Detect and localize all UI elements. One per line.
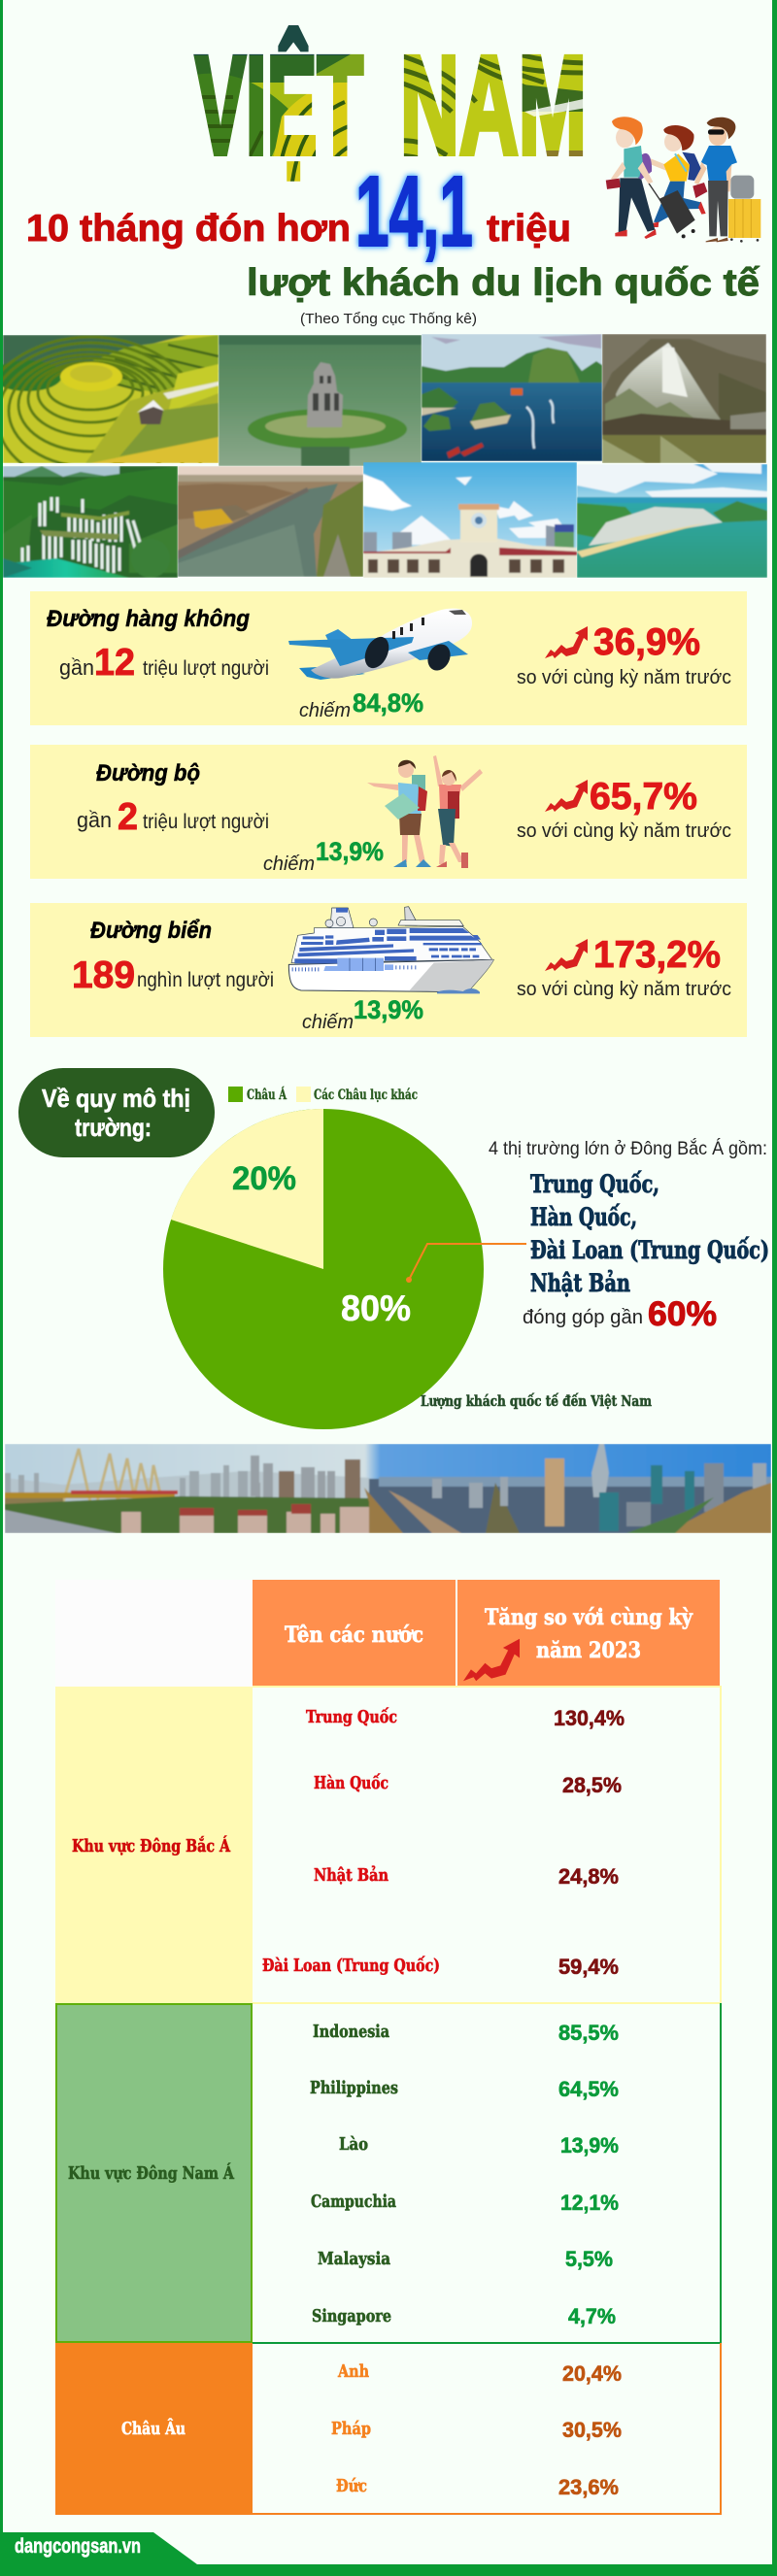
share: 13,9% road: chiếm [263, 853, 315, 875]
row: Đức: 23,6% [558, 2475, 619, 2499]
row: Lào: Lào [339, 2134, 368, 2155]
photo collage [0, 334, 767, 578]
row: Pháp [331, 2418, 622, 2442]
row: Singapore [312, 2304, 616, 2328]
share: 13,9% sea: chiếm [302, 1012, 354, 1033]
region label: Châu Âu [121, 2417, 186, 2439]
row: Campuchia [311, 2191, 619, 2215]
row: Trung Quốc: 130,4% [554, 1706, 625, 1730]
region label: Khu vực Đông Bắc Á [72, 1834, 231, 1857]
slice label: 20%: 20% [232, 1160, 296, 1197]
row: Trung Quốc [306, 1706, 625, 1730]
row: Singapore: 4,7% [568, 2304, 616, 2328]
row: Đài Loan: Đài Loan (Trung Quốc) [262, 1955, 440, 1976]
table header [55, 1580, 720, 1687]
photo: Turtle Tower on Hoan Kiem lake [219, 335, 422, 466]
row: Anh: Anh [337, 2361, 369, 2382]
text block: four North-East Asian markets: 4 thị trường lớn ở Đông Bắc Á gồm: [489, 1138, 767, 1159]
row: Đài Loan: 59,4% [558, 1955, 619, 1979]
row: Hàn Quốc: 28,5% [562, 1773, 622, 1797]
photo: Phu Quoc coast [577, 464, 767, 578]
row: Philippines [310, 2077, 619, 2101]
subheading line 1: triệu [487, 208, 571, 250]
photo: Ben Thanh market [363, 462, 577, 578]
text block: four North-East Asian markets: 60% [648, 1295, 717, 1333]
stat: 2 million people [77, 796, 269, 838]
photo: Son Doong cave [602, 334, 766, 463]
chart caption: Lượng khách quốc tế đến Việt Nam [421, 1392, 652, 1410]
growth: 65,7%: 65,7% [590, 776, 697, 818]
row: Đài Loan [262, 1955, 619, 1979]
heading: road: Đường bộ [96, 760, 200, 786]
pill heading: market scale: trường: [75, 1113, 152, 1142]
icon: airplane [288, 609, 472, 680]
slice label: 80%: 80% [341, 1288, 411, 1328]
row: Campuchia: Campuchia [311, 2191, 396, 2212]
row: Philippines: Philippines [310, 2078, 398, 2098]
row: Lào [339, 2133, 619, 2158]
row: Indonesia: 85,5% [558, 2021, 619, 2045]
growth: 173,2% [517, 934, 731, 1000]
panel: sea travel [30, 903, 747, 1037]
photo: Hoi An riverside [178, 466, 363, 577]
share: 13,9% sea: 13,9% [354, 995, 423, 1024]
growth: 36,9% [517, 621, 731, 688]
stat: 189 thousand people: nghìn lượt người [137, 969, 274, 991]
growth: 173,2%: so với cùng kỳ năm trước [517, 979, 731, 1000]
row: Campuchia: 12,1% [560, 2191, 619, 2215]
footer: source tab [0, 2532, 777, 2576]
row: Nhật Bản: 24,8% [558, 1864, 619, 1889]
table section: South-East Asia [56, 2003, 721, 2343]
region label: Khu vực Đông Nam Á [68, 2161, 235, 2184]
column heading: growth vs 2023 [485, 1605, 693, 1663]
row: Trung Quốc: Trung Quốc [306, 1706, 397, 1727]
panel: road travel [30, 745, 747, 879]
headline number 14,1: 14,1 [355, 155, 473, 267]
icon: growth arrow [463, 1639, 520, 1681]
row: Indonesia [313, 2021, 619, 2045]
chart legend [228, 1086, 418, 1103]
pill heading: market scale: Về quy mô thị [42, 1084, 190, 1113]
row: Nhật Bản: Nhật Bản [314, 1864, 388, 1886]
row: Đức: Đức [336, 2476, 367, 2496]
row: Singapore: Singapore [312, 2306, 391, 2326]
stat: 12 million people: 12 [94, 642, 135, 684]
stat: 189 thousand people [72, 954, 274, 996]
heading: air: Đường hàng không [47, 606, 250, 632]
stat: 12 million people: gần [59, 655, 94, 680]
text block: four North-East Asian markets: đóng góp gần [523, 1307, 643, 1328]
share: 84,8% [299, 688, 423, 721]
share: 13,9% road: 13,9% [316, 837, 384, 866]
row: Philippines: 64,5% [558, 2077, 619, 2101]
icon: two hikers [367, 755, 483, 868]
row: Malaysia [318, 2247, 613, 2271]
row: Đức [336, 2475, 619, 2499]
stat: 12 million people: triệu lượt người [143, 657, 269, 680]
growth: 173,2%: 173,2% [593, 934, 721, 976]
panel: air travel [30, 591, 747, 725]
subheading line 1 [26, 208, 571, 250]
pill heading: market scale [18, 1068, 215, 1157]
table section: Europe [55, 2343, 721, 2515]
pie chart: visitor share [163, 1109, 484, 1429]
icon: cruise ship [288, 907, 493, 993]
text block: four North-East Asian markets: Trung Quốc, [530, 1170, 659, 1198]
row: Pháp: Pháp [331, 2419, 371, 2439]
subheading line 2: lượt khách du lịch quốc tế [247, 262, 760, 304]
share: 84,8%: 84,8% [353, 688, 423, 718]
row: Pháp: 30,5% [562, 2418, 622, 2442]
text block: four North-East Asian markets: Nhật Bản [530, 1269, 630, 1297]
subheading line 1: 10 tháng đón hơn [26, 208, 351, 250]
stat: 2 million people: triệu lượt người [143, 811, 269, 833]
row: Anh [337, 2361, 622, 2386]
text block: four North-East Asian markets [489, 1138, 769, 1333]
photo: Ban Gioc waterfall [3, 466, 178, 578]
share: 13,9% road [263, 837, 384, 875]
icon: group of tourists with luggage [606, 117, 760, 243]
stat: 2 million people: gần [77, 808, 112, 832]
share: 84,8%: chiếm [299, 700, 351, 721]
share: 13,9% sea [302, 995, 423, 1033]
column heading: growth vs 2023: năm 2023 [536, 1638, 641, 1663]
row: Malaysia: 5,5% [565, 2247, 613, 2271]
stat: 2 million people: 2 [118, 796, 138, 838]
table section: North-East Asia [55, 1687, 721, 2003]
row: Malaysia: Malaysia [318, 2249, 390, 2269]
row: Lào: 13,9% [560, 2133, 619, 2158]
title: VIỆT NAM: NAM [400, 27, 587, 184]
column heading: growth vs 2023: Tăng so với cùng kỳ [485, 1605, 693, 1630]
growth: 65,7%: so với cùng kỳ năm trước [517, 820, 731, 842]
row: Hàn Quốc: Hàn Quốc [314, 1772, 388, 1793]
footer: source tab: dangcongsan.vn [15, 2535, 141, 2558]
growth: 36,9%: 36,9% [593, 621, 700, 663]
photo: rice terraces [3, 335, 219, 463]
banner photo: Hanoi and Ho Chi Minh City skylines [5, 1444, 771, 1533]
source note: (Theo Tổng cục Thống kê) [300, 311, 477, 327]
growth: 65,7% [517, 776, 731, 842]
callout line [406, 1244, 526, 1283]
chart legend: Châu Á [247, 1086, 287, 1103]
row: Nhật Bản [314, 1864, 619, 1889]
text block: four North-East Asian markets: Hàn Quốc, [530, 1203, 637, 1231]
growth: 36,9%: so với cùng kỳ năm trước [517, 667, 731, 688]
chart legend: Các Châu lục khác [314, 1087, 418, 1103]
row: Indonesia: Indonesia [313, 2022, 389, 2042]
heading: sea: Đường biển [90, 918, 212, 944]
column heading: country names: Tên các nước [285, 1623, 423, 1648]
photo: Ha Long Bay [422, 334, 602, 461]
stat: 12 million people [59, 642, 269, 684]
row: Anh: 20,4% [562, 2361, 622, 2386]
title: VIỆT NAM: VIỆT [195, 27, 363, 184]
row: Hàn Quốc [314, 1772, 622, 1797]
stat: 189 thousand people: 189 [72, 954, 135, 996]
